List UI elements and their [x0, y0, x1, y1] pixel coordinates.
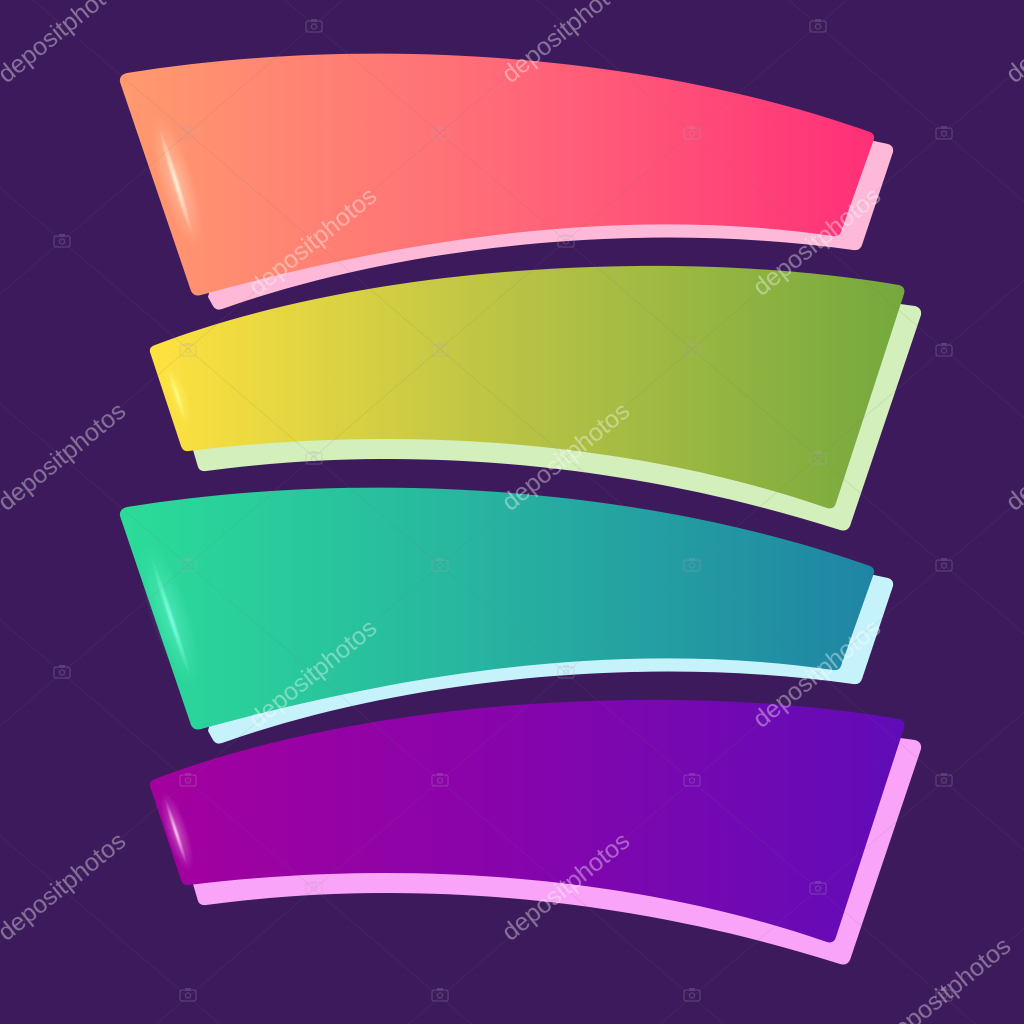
watermark text: depositphotos	[244, 182, 382, 302]
banner 3 highlight	[127, 537, 213, 693]
watermark text: depositphotos	[497, 397, 635, 517]
banner 2 back layer	[193, 300, 921, 530]
banner 1: coral pink	[120, 54, 893, 310]
banner 4 highlight	[154, 789, 200, 875]
banner 4: purple	[150, 700, 921, 964]
banner 4 front	[150, 700, 904, 942]
banner 3 back layer	[208, 572, 893, 744]
banner 2 front	[150, 266, 904, 508]
watermark text: depositphotos	[748, 182, 886, 302]
banner 3: teal	[120, 488, 893, 744]
watermark text: depositphotos	[497, 827, 635, 947]
banner 1 back layer	[208, 138, 893, 310]
banner 4 back layer	[193, 734, 921, 964]
banner 1 front	[120, 54, 874, 296]
banner 1 highlight	[140, 110, 214, 254]
watermark text: depositphotos	[244, 614, 382, 734]
banner 2: yellow green	[150, 266, 921, 530]
banner 3 front	[120, 488, 874, 730]
watermark text: depositphotos	[748, 614, 886, 734]
banner 2 highlight	[159, 360, 197, 430]
